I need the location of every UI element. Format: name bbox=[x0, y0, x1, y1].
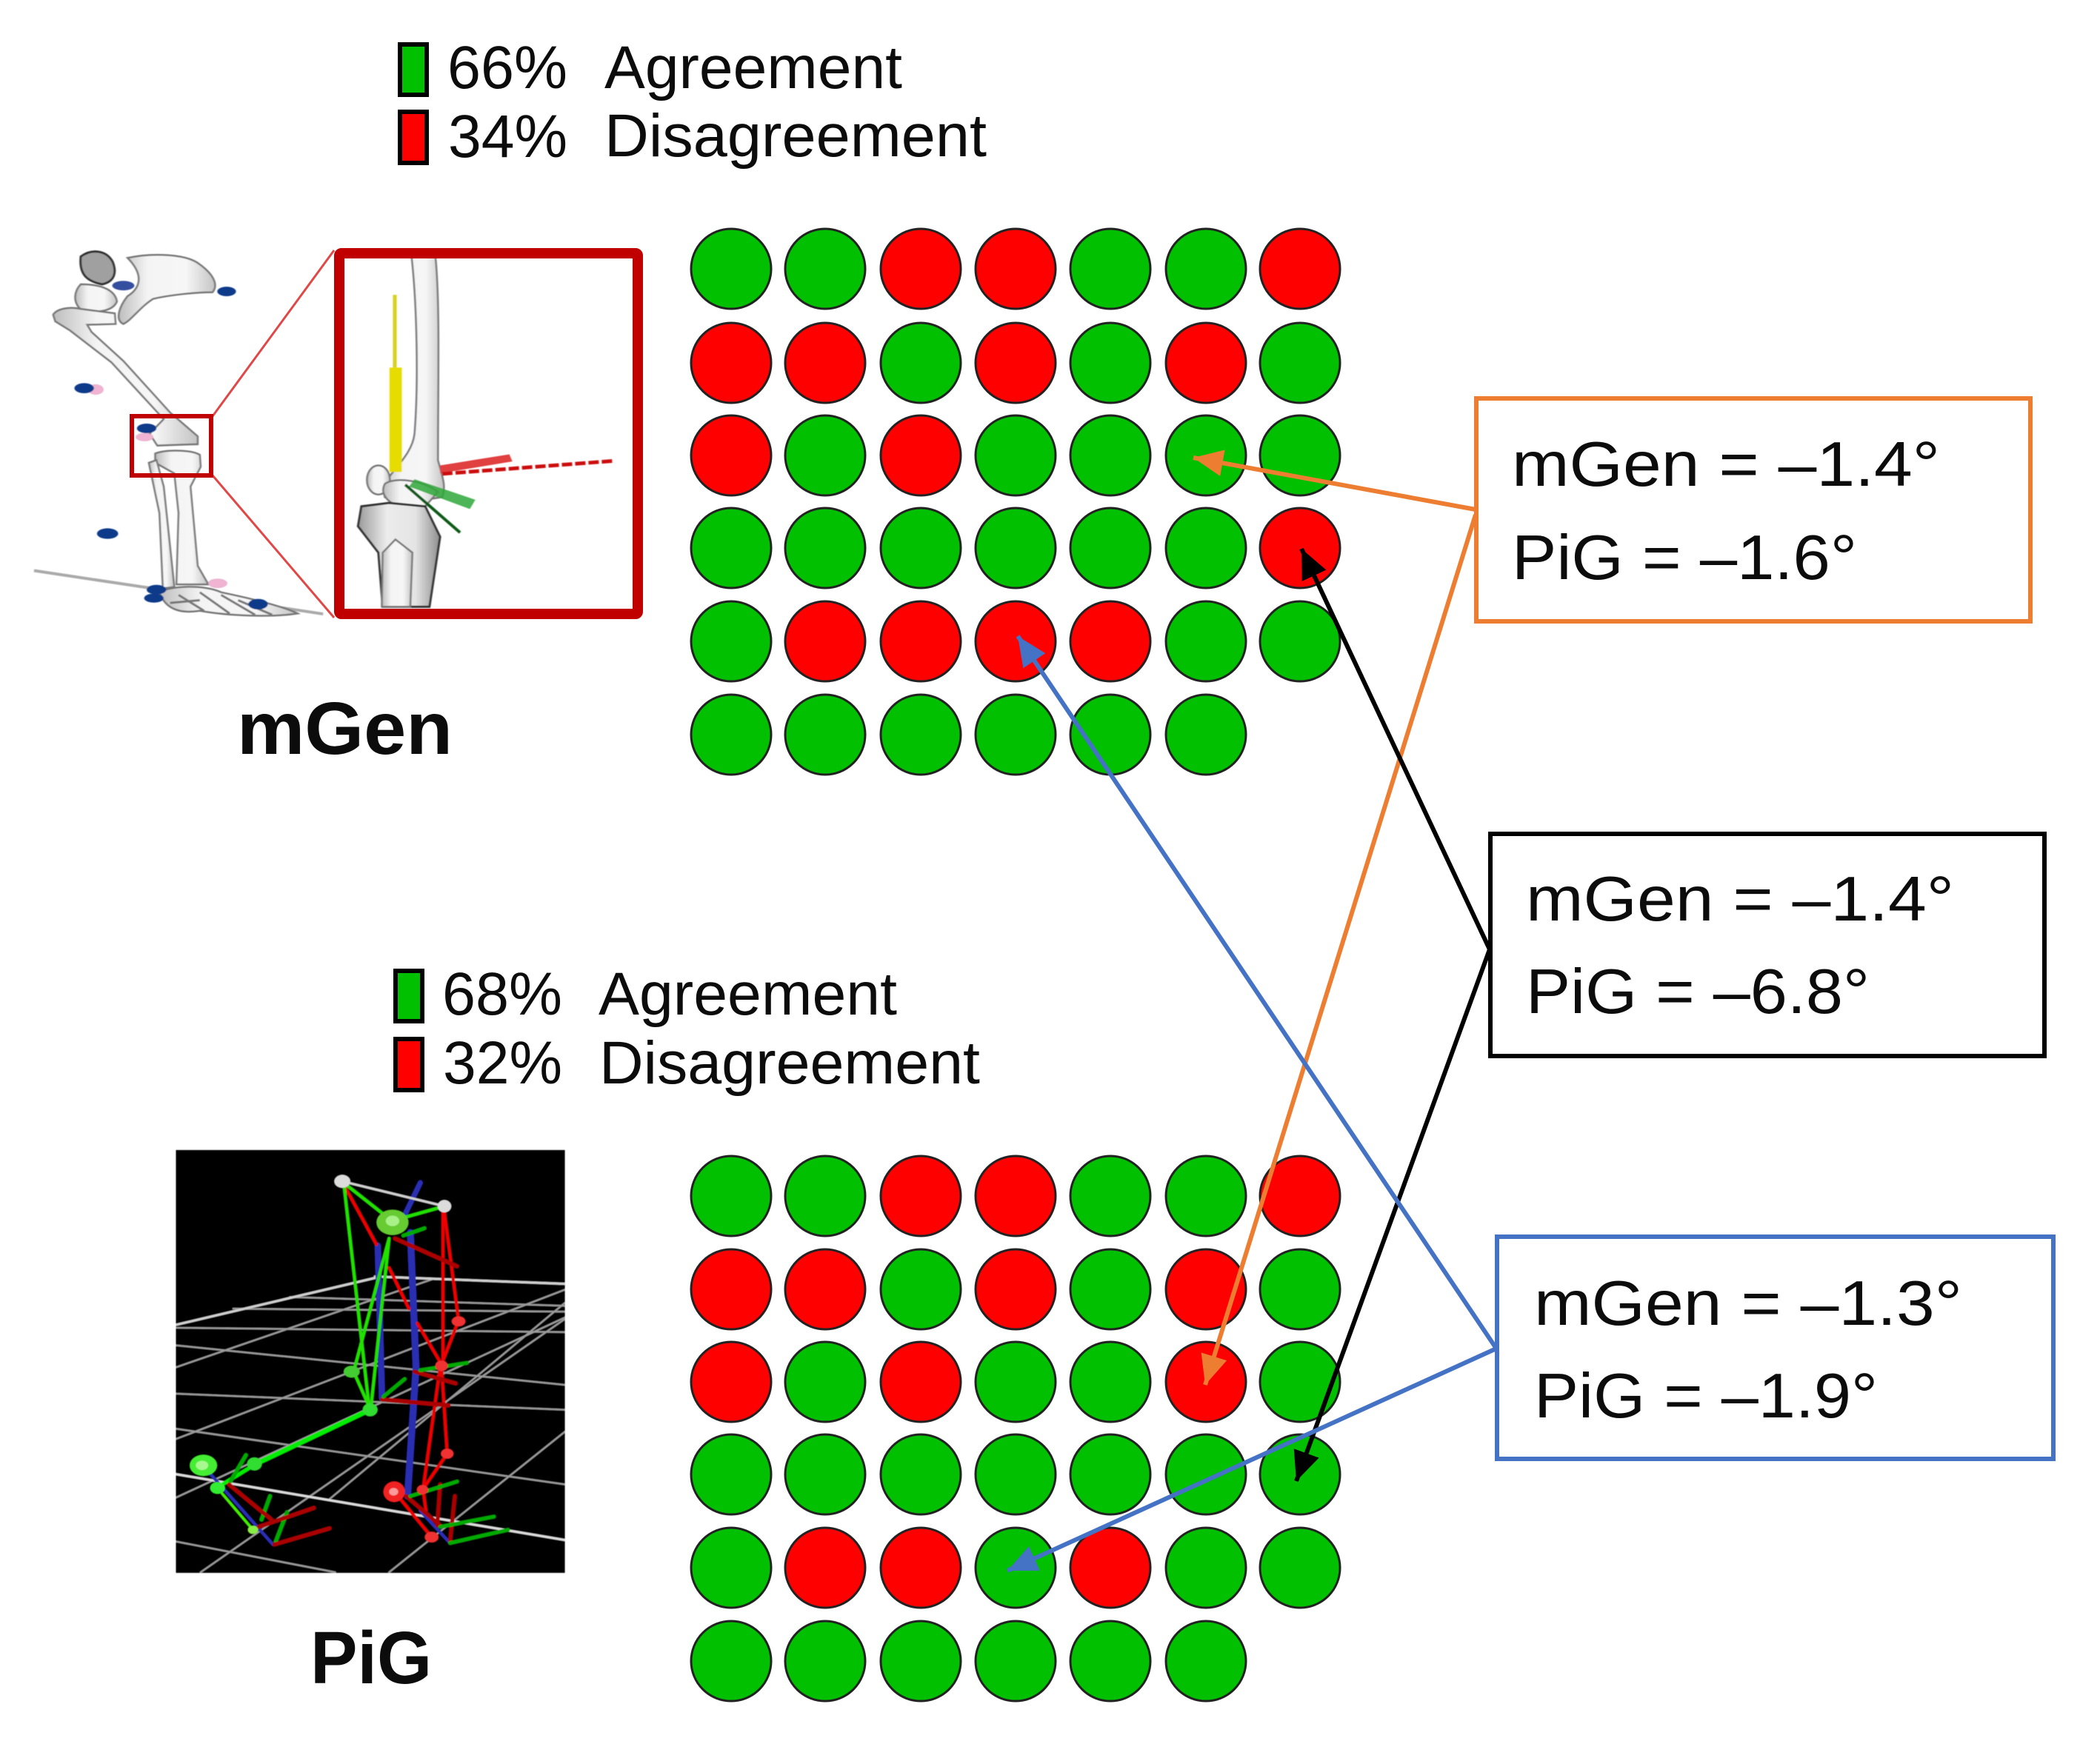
small red selection box bbox=[132, 416, 211, 475]
left foot bbox=[256, 1410, 370, 1464]
callout: black values bbox=[1490, 834, 2044, 1056]
legend: PiG agreement: 32% bbox=[443, 1029, 562, 1097]
legend: PiG agreement: 68% bbox=[442, 960, 562, 1028]
legend: mGen agreement: 34% bbox=[448, 103, 567, 170]
joints bbox=[190, 1175, 465, 1543]
legend: PiG agreement: Agreement bbox=[599, 960, 897, 1028]
legend: mGen agreement: 66% bbox=[447, 34, 567, 101]
legend: mGen agreement: Disagreement bbox=[604, 102, 987, 170]
callout: orange values: PiG = –1.6° bbox=[1512, 523, 1857, 593]
grid: PiG dots bbox=[691, 1156, 1340, 1701]
right leg bbox=[404, 1183, 420, 1215]
image: PiG 3D stick model on dark grid bbox=[176, 1150, 565, 1573]
inset red frame bbox=[339, 253, 638, 614]
callout: black values: mGen = –1.4° bbox=[1526, 864, 1954, 935]
arrows: orange callout to both grids bbox=[1193, 458, 1476, 1385]
heading: PiG: PiG bbox=[310, 1617, 432, 1700]
legend: mGen agreement: Agreement bbox=[604, 34, 902, 101]
callout: orange values: mGen = –1.4° bbox=[1512, 430, 1940, 500]
image: mGen skeletal leg model with knee inset bbox=[34, 250, 638, 618]
heading: mGen: mGen bbox=[237, 687, 453, 770]
callout: blue values: PiG = –1.9° bbox=[1534, 1361, 1878, 1431]
arrows: blue callout to both grids bbox=[1007, 636, 1496, 1571]
grid: mGen dots bbox=[691, 229, 1340, 775]
zoom guide lines bbox=[213, 250, 334, 618]
legend: PiG agreement bbox=[396, 960, 980, 1097]
inset: knee close-up bbox=[358, 256, 613, 607]
callout: black values: PiG = –6.8° bbox=[1526, 957, 1870, 1027]
callout: orange values bbox=[1476, 398, 2030, 621]
skeleton leg bbox=[34, 252, 323, 615]
legend: PiG agreement: Disagreement bbox=[599, 1029, 980, 1097]
legend: mGen agreement bbox=[400, 34, 987, 170]
callout: blue values bbox=[1497, 1237, 2053, 1459]
callout: blue values: mGen = –1.3° bbox=[1534, 1269, 1962, 1339]
arrows: black callout to both grids bbox=[1296, 549, 1490, 1481]
